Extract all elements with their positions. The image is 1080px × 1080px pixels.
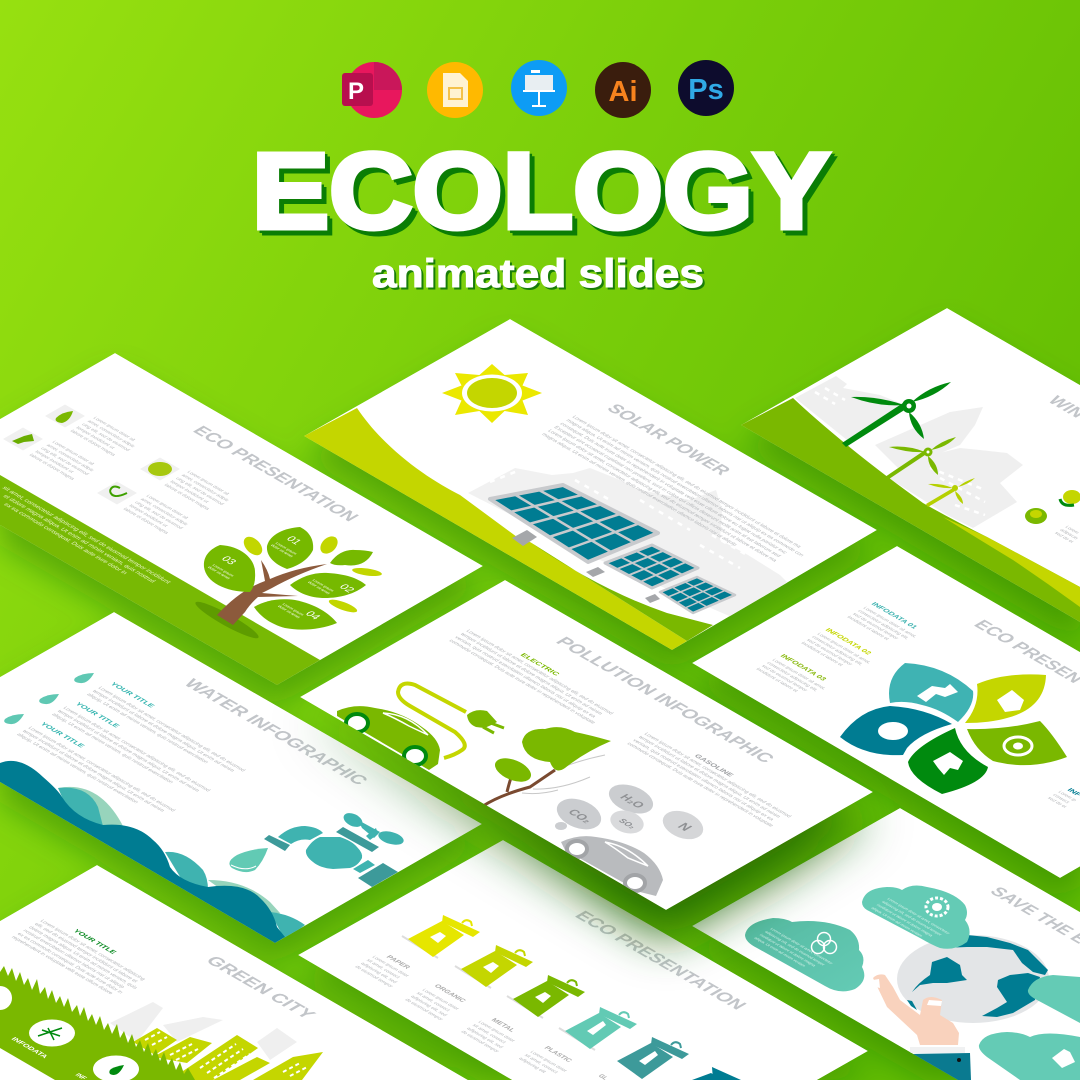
leaf 03: dolor sit amet (207, 565, 232, 580)
electric car (337, 706, 440, 770)
solar body text: Excepteur sint occaecat cupidatat non proident, sunt in culpa qui officia deserunt mollit anim id est laborum sed (552, 425, 782, 558)
text block 1: tempor incididunt ut (74, 426, 116, 450)
infodata 04: sed do ei (1046, 796, 1068, 809)
turbine large (842, 382, 951, 447)
green city body text: reprehenderit in voluptate velit esse cillum dolore (10, 935, 114, 996)
wind body text: Lorem (1063, 525, 1080, 535)
leaf 03: Lorem ipsum (211, 563, 236, 578)
icon: globe (1060, 490, 1080, 505)
cloud: sun: aliqua. Ut enim ad minim veniam (870, 906, 925, 938)
solar title: SOLAR POWER (603, 401, 736, 478)
cloud: biohazard: Lorem ipsum dolor sit amet, consectetur (769, 927, 835, 965)
infodata 03: Lorem ipsum dolor sit amet, (770, 658, 827, 691)
leaf 01: 01 (283, 535, 304, 546)
leaf 03: 03 (218, 555, 239, 566)
drop 2 (39, 694, 59, 704)
bin: metal (507, 975, 585, 1018)
cloud: SO2: SO₂ (616, 817, 639, 830)
cloud: biohazard: incididunt ut labore et dolore magna (758, 933, 818, 967)
infodata 01: incididunt ut labore et (845, 615, 891, 641)
tree trunk (217, 560, 327, 625)
cloud: sun: adipiscing elit, sed do eiusmod tempor (881, 900, 944, 937)
bin label: metal: sit amet, consect (471, 1023, 508, 1045)
leaf 02: Lorem ipsum (311, 578, 336, 593)
bin: organic (455, 945, 533, 988)
sun (442, 364, 542, 423)
text block 3: Lorem ipsum dolor sit (185, 470, 231, 496)
solar body text: Lorem ipsum dolor sit amet, consectetur adipiscing elit, sed do eiusmod tempor incididunt ut labore et dolore ma (570, 415, 802, 549)
solar body text: magna aliqua. Ut enim ad minim veniam, quis nostrud exercitation ullamco laboris nisi ut aliquip ex ea commodo con (564, 418, 805, 558)
icon: Photoshop: Ps (688, 74, 724, 106)
wind body text: adipiscin (1058, 528, 1080, 541)
grass band (0, 966, 195, 1080)
ground shadows (0, 328, 1080, 1080)
item 2: tempor incididunt ut labore et dolore magna aliqua. Ut enim ad minim (56, 709, 201, 793)
leaf 02: dolor sit amet (307, 580, 332, 595)
icon: turbine (38, 1028, 62, 1040)
item 3: tempor incididunt ut labore et dolore magna aliqua. Ut enim ad minim (21, 729, 166, 813)
text block 1: Lorem ipsum dolor sit (91, 416, 137, 442)
infodata 04: consect (1051, 793, 1071, 805)
text block 4: amet, consectetur adipis (139, 497, 190, 527)
bin label: paper: sit amet, consect (365, 958, 402, 980)
infodata 02 (799, 628, 873, 674)
gray city silhouette (110, 1002, 297, 1060)
text block 2: labore et dolore magna (27, 453, 76, 481)
text block 3: labore et dolore magna (162, 483, 211, 511)
text block 2: amet, consectetur adipis (45, 443, 96, 473)
leaf 01: Lorem ipsum (274, 541, 299, 556)
tree (483, 727, 611, 806)
infodata 01: INFODATA 01 (869, 602, 919, 630)
leaf 04: 04 (302, 610, 323, 621)
item 3: YOUR TITLE (38, 722, 86, 749)
panel: eco leaf slide (692, 546, 1080, 878)
strip text: et dolore magna aliqua. Ut enim ad minim veniam, quis nostrud (1, 494, 157, 584)
infodata 04 (1046, 788, 1080, 809)
building windows (145, 1032, 307, 1078)
infodata 01: Lorem ipsum dolor sit amet, (861, 606, 918, 639)
infodata 04: Lorem ip (1056, 790, 1078, 803)
green city body text: elit, sed do eiusmod tempor incididunt ut labore et (33, 922, 139, 984)
bin label: paper: adipiscing elit, sed (359, 962, 399, 984)
petal: green (967, 721, 1067, 765)
text block 4: tempor incididunt ut (127, 504, 169, 528)
cloud: H2O (605, 779, 657, 819)
strip text: sit amet, consectetur adipiscing elit, sed do eiusmod tempor incididunt (0, 486, 172, 585)
faucet (229, 810, 405, 887)
bin label: paper: do eiusmod tempor (353, 965, 395, 989)
finger nail (927, 1000, 942, 1006)
item 1: YOUR TITLE (108, 682, 156, 709)
leaf 02: 02 (336, 583, 357, 594)
infodata 03: incididunt ut labore et (754, 667, 800, 693)
text block 1: amet, consectetur adipis (86, 419, 137, 449)
green city body text: Lorem ipsum dolor sit amet, consectetur adipiscing (38, 919, 146, 981)
icon: biohazard (812, 932, 836, 954)
item 2: YOUR TITLE (73, 702, 121, 729)
title: ECOLOGY (254, 132, 832, 254)
solar panel medium (586, 545, 698, 588)
drop 1 (74, 673, 94, 683)
gasoline label: GASOLINE (692, 754, 735, 778)
infodata 02: sed do eiusmod tempor (805, 638, 854, 667)
green city body text: ex ea commodo consequat. Duis aute irure dolor in (15, 932, 124, 995)
leaf 04: Lorem ipsum (281, 602, 306, 617)
panel: save the earth slide (692, 808, 1080, 1080)
lime band (943, 517, 1080, 607)
green city heading: YOUR TITLE (71, 929, 118, 956)
icon tile: bulb (140, 458, 180, 480)
infodata 02: consectetur adipiscing elit, (810, 635, 864, 666)
title: ECOLOGY (257, 135, 835, 256)
globe (897, 935, 1049, 1023)
infodata 01 (845, 602, 919, 648)
bin label: organic: ORGANIC (432, 984, 467, 1004)
icon: Illustrator (595, 62, 651, 118)
item 1: Lorem ipsum dolor sit amet, consectetur adipiscing elit, sed do eiusmod (96, 686, 246, 773)
text block 4: Lorem ipsum dolor sit (144, 494, 190, 520)
bin label: organic: do eiusmod tempor (403, 998, 445, 1022)
green city body text: dolore magna aliqua. Ut enim ad minim veniam, quis (27, 926, 139, 990)
item 2: Lorem ipsum dolor sit amet, consectetur adipiscing elit, sed do eiusmod (61, 706, 211, 793)
gasoline body text: commodo consequat. Duis aute irure dolor in reprehenderit in voluptate (625, 742, 775, 828)
panel: water infographic slide (0, 612, 482, 943)
bin label: plastic: Lorem ipsum dolor (528, 1050, 569, 1073)
bin: plastic (559, 1007, 637, 1050)
leaf 01: dolor sit amet (270, 543, 295, 558)
electric label: ELECTRIC (518, 653, 561, 677)
gasoline body text: veniam, quis nostrud exercitation ullamco laboris nisi ut aliquip ex ea (631, 739, 775, 822)
text block 3: cing elit, sed do eiusmod (174, 477, 225, 506)
leaf 01 (267, 527, 313, 569)
cloud: biohazard: adipiscing elit, sed do eiusmod tempor (764, 930, 827, 967)
bin label: organic (406, 984, 466, 1020)
item 2: aliquip. Ut enim ad minim veniam, quis nostrud exercitation (50, 713, 175, 785)
petal: teal (889, 663, 973, 722)
small leaf lime 3 (352, 566, 382, 578)
cuff (910, 1047, 965, 1053)
text block 1: cing elit, sed do eiusmod (80, 423, 131, 452)
cloud: right (1028, 975, 1080, 1023)
small leaf lime 2 (317, 533, 341, 557)
sleeve (910, 1053, 971, 1080)
item 1: aliquip. Ut enim ad minim veniam, quis nostrud exercitation (85, 693, 210, 765)
cloud: biohazard: aliqua. Ut enim ad minim veniam (753, 936, 808, 968)
waves (0, 761, 305, 943)
small leaf green (330, 550, 373, 565)
cloud: H2O: H₂O (617, 793, 647, 810)
solar panel small (645, 577, 735, 613)
bin label: organic: Lorem ipsum dolor (420, 988, 461, 1011)
bin label: plastic: adipiscing elit (517, 1057, 548, 1074)
infodata circle 2 (93, 1055, 139, 1080)
drop 3 (4, 714, 24, 724)
text block 2: tempor incididunt ut (33, 450, 75, 474)
text block 2: Lorem ipsum dolor sit (50, 440, 96, 466)
bin label: organic: adipiscing elit, sed (409, 995, 449, 1017)
bin label: metal: adipiscing elit, sed (465, 1027, 505, 1049)
turbine medium (885, 437, 956, 479)
bin label: organic: sit amet, consect (415, 991, 452, 1013)
item 3: aliquip. Ut enim ad minim veniam, quis nostrud exercitation (15, 733, 140, 805)
city silhouette (795, 376, 1023, 528)
bins title: ECO PRESENTATION (571, 908, 751, 1012)
bin: paper (402, 915, 480, 958)
cloud: sun (862, 886, 970, 949)
infodata circle 3 (0, 986, 12, 1010)
cloud: biohazard (745, 918, 864, 991)
water title: WATER INFOGRAPHIC (180, 676, 373, 788)
icon: sun gear (926, 898, 948, 916)
hand (873, 974, 959, 1045)
icon tile: tap (3, 428, 43, 450)
leaf 03 (204, 545, 255, 592)
panel: solar power slide (304, 319, 877, 650)
tree slide title: ECO PRESENTATION (189, 423, 363, 524)
icon: Google Slides (427, 62, 483, 118)
city silhouette (468, 468, 795, 625)
text block 3: amet, consectetur adipis (180, 473, 231, 503)
cloud: factory (979, 1032, 1080, 1080)
infodata 03 (754, 654, 828, 700)
green city body text: nostrud exercitation ullamco laboris nisi ut aliquip (21, 929, 126, 989)
lime band (304, 408, 687, 650)
cloud: sun: Lorem ipsum dolor sit amet, consectetur (886, 897, 952, 935)
cloud: CO2 (553, 793, 605, 835)
icon tile: plug (97, 482, 137, 504)
petal: lime (965, 674, 1046, 723)
icon: coin (1025, 508, 1047, 524)
icon: factory (1052, 1049, 1075, 1068)
bin: other (692, 1067, 741, 1080)
infodata 01: sed do eiusmod tempor (851, 612, 900, 641)
infodata 02: Lorem ipsum dolor sit amet, (815, 632, 872, 665)
icon: Keynote (511, 60, 567, 116)
wind body text: sed do ei (1053, 531, 1075, 544)
solar body text: magna aliqua. Ut enim ad minim veniam, quis nostrud exercitation ullamco laboris nisi ut aliquip (540, 432, 738, 547)
icon: PowerPoint (342, 62, 402, 118)
bin label: metal (462, 1018, 515, 1052)
green band (741, 398, 1080, 622)
solar body text: Lorem ipsum dolor sit amet, consectetur adipiscing elit, sed do eiusmod tempor incididunt ut labore et dolore ma (546, 429, 778, 563)
petal: dark teal (840, 706, 952, 755)
gasoline body text: tempor incididunt ut labore et dolore magna aliqua. Ut enim ad minim (637, 735, 782, 819)
solar body text: consequat. Duis aute irure dolor in reprehenderit in voluptate velit esse cillum dolore eu fugiat nulla pariatur exc (558, 422, 789, 555)
panel: recycling bins slide (298, 840, 868, 1080)
item 1: tempor incididunt ut labore et dolore magna aliqua. Ut enim ad minim (91, 689, 236, 773)
green city title: GREEN CITY (202, 953, 320, 1022)
electric body text: commodo consequat. Duis aute irure dolor in reprehenderit in voluptate (447, 639, 597, 725)
petal: dark green (908, 728, 988, 794)
bin label: metal: Lorem ipsum dolor (476, 1020, 517, 1043)
small leaf lime 4 (328, 597, 358, 615)
infodata 02: incididunt ut labore et (799, 641, 845, 667)
bin label: metal: METAL (489, 1018, 516, 1033)
cloud: SO2 (608, 807, 646, 837)
bin label: plastic: PLASTIC (542, 1046, 573, 1063)
infodata 03: INFODATA 03 (778, 654, 828, 682)
turbine small (926, 478, 975, 507)
icon tile: drop (45, 404, 85, 428)
icon: drop (109, 1065, 124, 1075)
gasoline car (561, 836, 663, 896)
small puff (555, 822, 567, 830)
panel: wind slide (741, 308, 1080, 622)
text block 1: labore et dolore magna (68, 429, 117, 457)
leaf 04 (254, 599, 337, 630)
lime city buildings (133, 1028, 323, 1080)
tree ground shadow (193, 597, 261, 643)
bin: glass (617, 1037, 689, 1079)
infodata 03: consectetur adipiscing elit, (765, 661, 819, 692)
leaf 04: dolor sit amet (277, 604, 302, 619)
cloud: sun: incididunt ut labore et dolore magna (875, 903, 935, 937)
plug (467, 710, 504, 733)
bin label: plastic (519, 1046, 572, 1074)
cloud: N: N (674, 821, 696, 833)
text block 3: tempor incididunt ut (168, 480, 210, 504)
cast shadow of pollution slide (300, 610, 873, 940)
gasoline body text: Lorem ipsum dolor sit amet, consectetur adipiscing elit, sed do eiusmod (642, 732, 792, 819)
icon: PowerPoint: P (348, 78, 364, 105)
electric body text: veniam, quis nostrud exercitation ullamco laboris nisi ut aliquip ex ea (453, 636, 597, 719)
text block 4: labore et dolore magna (121, 507, 170, 535)
infodata 02: INFODATA 02 (823, 628, 873, 656)
thumb nail (874, 979, 880, 988)
solar panel large (490, 485, 658, 562)
small leaf lime 1 (240, 533, 266, 559)
infodata 01: consectetur adipiscing elit, (856, 609, 910, 640)
subtitle: animated slides (372, 252, 704, 296)
infodata label: INFODATA (9, 1037, 49, 1060)
icon: Photoshop (678, 60, 734, 116)
text block 2: cing elit, sed do eiusmod (39, 447, 90, 476)
green band (530, 542, 713, 641)
panel: green city slide (0, 865, 468, 1080)
electric body text: tempor incididunt ut labore et dolore magna aliqua. Ut enim ad minim (459, 632, 604, 716)
infodata circle 1 (29, 1020, 75, 1046)
bin label: paper: PAPER (384, 955, 412, 970)
electric body text: Lorem ipsum dolor sit amet, consectetur adipiscing elit, sed do eiusmod (464, 629, 614, 716)
icon: Illustrator: Ai (608, 76, 638, 108)
bin label: metal: do eiusmod tempor (459, 1030, 501, 1054)
strip text: ex ea commodo consequat. Duis aute irure dolor in (2, 502, 129, 576)
panel: eco tree slide (0, 353, 483, 685)
bin label: paper: Lorem ipsum dolor (370, 955, 411, 978)
cloud: N (659, 806, 707, 844)
cloud: CO2: CO₂ (565, 808, 594, 825)
pollution title: POLLUTION INFOGRAPHIC (552, 634, 779, 766)
green strip (0, 475, 320, 685)
charging cord (398, 684, 466, 758)
title: ECOLOGY (252, 130, 830, 251)
subtitle: animated slides (374, 254, 706, 298)
text block 4: cing elit, sed do eiusmod (133, 501, 184, 530)
bin label: plastic: sit amet, consect (523, 1053, 560, 1075)
item 3: Lorem ipsum dolor sit amet, consectetur adipiscing elit, sed do eiusmod (26, 726, 176, 813)
infodata 03: sed do eiusmod tempor (760, 664, 809, 693)
bin label: paper (356, 955, 410, 987)
leaf 02 (290, 573, 366, 598)
panel: pollution infographic slide (300, 580, 873, 910)
